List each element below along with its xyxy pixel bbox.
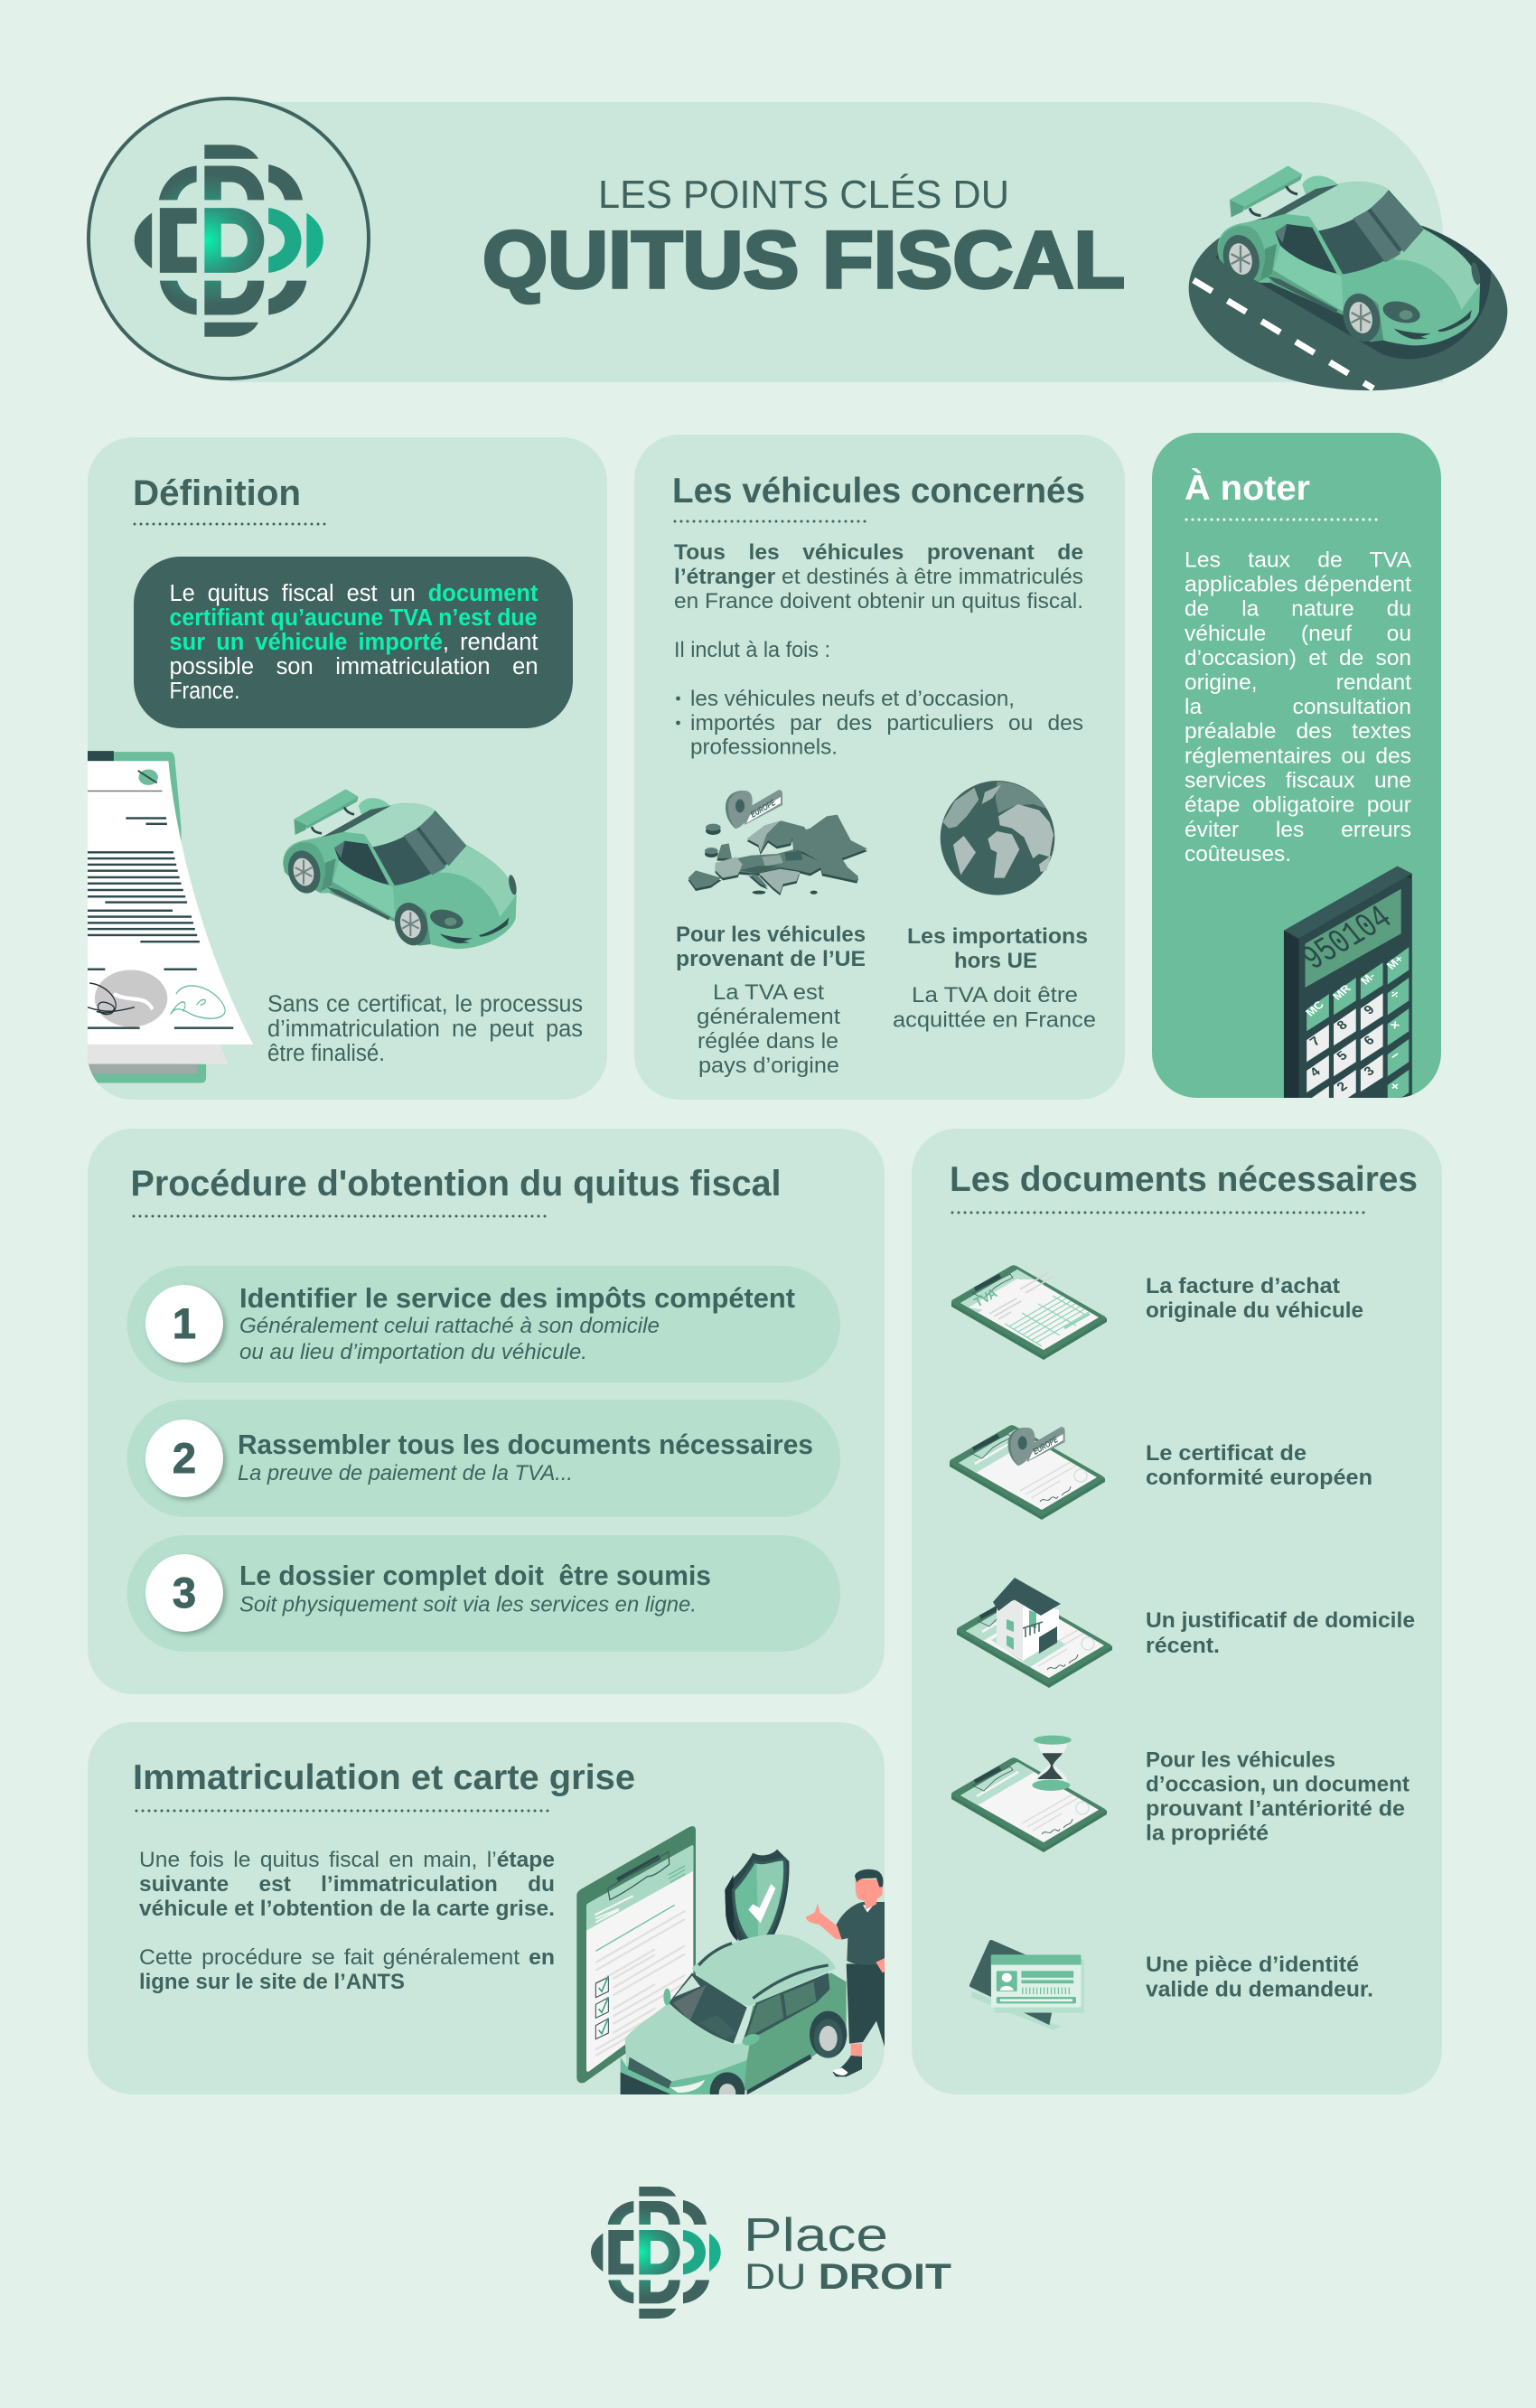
text: EU vehicles: Pour les véhicules (676, 923, 866, 947)
text: note: services fiscaux une (1185, 768, 1411, 793)
text: EU vehicles: provenant de l’UE (676, 947, 866, 971)
text: note: véhicule (neuf ou (1185, 622, 1411, 646)
heading: procédure: Procédure d'obtention du quitus fiscal (130, 1164, 781, 1204)
callout: definition: Le quitus fiscal est un document (170, 581, 539, 606)
step 2 (126, 1400, 840, 1517)
logo mark (591, 2187, 721, 2319)
step 1: ou au lieu d’importation du véhicule. (239, 1340, 587, 1364)
illustration: calculator: 2 (1335, 1080, 1351, 1094)
text: identité: Une pièce d’identité (1146, 1953, 1359, 1977)
panel: Définition (88, 437, 607, 1100)
brand name (744, 2209, 951, 2297)
illustration: calculator: 6 (1362, 1034, 1378, 1048)
panel: Les véhicules concernés (634, 435, 1125, 1100)
text: note: la consultation (1185, 695, 1411, 719)
text: sans ce certificat: Sans ce certificat, le processus (267, 992, 583, 1017)
header band (89, 98, 1516, 406)
heading: À noter: À noter (1185, 468, 1310, 508)
step 2: La preuve de paiement de la TVA... (238, 1461, 573, 1485)
text: non-EU imports (893, 924, 1096, 1032)
text: vehicles intro and list: l’étranger et destinés à être immatriculés (674, 565, 1083, 589)
illustration: calculator: MC (1303, 998, 1326, 1018)
text: vehicles intro and list (674, 540, 1083, 759)
text: immatriculation: Une fois le quitus fiscal en main, l’étape (139, 1848, 555, 1872)
illustration: calculator: 5 (1335, 1049, 1351, 1063)
text: note: coûteuses. (1185, 842, 1291, 867)
step 2: 2 (173, 1434, 196, 1482)
text: note: d’occasion) et de son (1185, 646, 1411, 670)
text: sans ce certificat: être finalisé. (267, 1041, 385, 1066)
text: immatriculation (139, 1848, 555, 1994)
icon: house on clipboard (957, 1578, 1112, 1688)
illustration: calculator: 8 (1335, 1018, 1351, 1033)
illustration: Europe map (688, 790, 867, 895)
text: note (1185, 548, 1412, 867)
step 1: Généralement celui rattaché à son domicile (239, 1314, 660, 1338)
callout: definition (134, 557, 573, 728)
panel: Les documents nécessaires (912, 1129, 1442, 2094)
car (621, 1935, 847, 2112)
step 3: Le dossier complet doit être soumis (239, 1560, 711, 1591)
step 1: Identifier le service des impôts compétent (239, 1283, 795, 1314)
illustration: calculator: ÷ (1387, 988, 1403, 1002)
text: non-EU imports: La TVA doit être (912, 983, 1078, 1007)
text: note: origine, rendant (1185, 670, 1411, 695)
callout: definition: possible son immatriculation en (170, 654, 539, 679)
brand name: Place (744, 2209, 888, 2262)
text: non-EU imports: acquittée en France (893, 1008, 1096, 1032)
text: antériorité (1146, 1747, 1410, 1846)
icon: European certificate clipboard (950, 1425, 1105, 1520)
text: sans ce certificat (267, 992, 583, 1066)
panel: À noter (1152, 433, 1441, 1123)
text: certificat: conformité européen (1146, 1466, 1372, 1490)
title: LES POINTS CLÉS DU (598, 173, 1009, 217)
text: identité: valide du demandeur. (1146, 1978, 1373, 2002)
man (806, 1869, 885, 2076)
text: immatriculation: ligne sur le site de l’ANTS (139, 1970, 405, 1994)
text: EU vehicles: pays d’origine (698, 1054, 839, 1078)
illustration: calculator: MR (1329, 982, 1353, 1002)
text: immatriculation: Cette procédure se fait généralement en (139, 1945, 555, 1970)
text: immatriculation: suivante est l’immatriculation du (139, 1872, 555, 1897)
text: note: étape obligatoire pour (1185, 793, 1411, 818)
text: vehicles intro and list: Tous les véhicules provenant de (674, 540, 1083, 565)
text: facture: originale du véhicule (1146, 1298, 1363, 1323)
callout: definition: France. (170, 679, 240, 704)
footer logo (591, 2187, 951, 2319)
text: non-EU imports: Les importations (907, 924, 1088, 949)
step 1 (126, 1266, 840, 1382)
illustration: calculator: 4 (1307, 1065, 1325, 1080)
illustration: globe (941, 781, 1054, 895)
text: antériorité: la propriété (1146, 1822, 1269, 1846)
step 3: Soit physiquement soit via les services en ligne. (239, 1592, 697, 1617)
heading: immatriculation: Immatriculation et carte grise (133, 1758, 635, 1797)
icon: invoice clipboard (951, 1265, 1107, 1360)
text: vehicles intro and list: les véhicules neufs et d’occasion, (690, 687, 1015, 711)
heading: véhicules concernés: Les véhicules concernés (672, 472, 1085, 511)
step 1: 1 (173, 1299, 196, 1347)
text: certificat (1146, 1441, 1372, 1490)
illustration: calculator: M+ (1383, 952, 1406, 971)
text: sans ce certificat: d’immatriculation ne peut pas (267, 1017, 583, 1042)
illustration: green car (283, 789, 518, 949)
panel: Immatriculation (88, 1722, 885, 2112)
step 3 (126, 1535, 840, 1652)
text: identité (1146, 1953, 1373, 2002)
text: antériorité: prouvant l’antériorité de (1146, 1797, 1405, 1822)
text: vehicles intro and list: professionnels. (690, 736, 838, 759)
text: domicile (1146, 1608, 1415, 1658)
text: facture: La facture d’achat (1146, 1274, 1340, 1298)
illustration: calculator: + (1387, 1080, 1404, 1094)
text: vehicles intro and list: Il inclut à la fois : (674, 638, 830, 662)
illustration: calculator (1284, 867, 1412, 1123)
title (482, 173, 1125, 305)
text: note: éviter les erreurs (1185, 818, 1411, 842)
text: EU vehicles: généralement (697, 1005, 840, 1029)
text: EU vehicles: réglée dans le (698, 1029, 838, 1054)
text: domicile: Un justificatif de domicile (1146, 1608, 1415, 1633)
illustration: car on road (1189, 166, 1507, 390)
text: note: réglementaires ou des (1185, 745, 1411, 768)
callout: definition: sur un véhicule importé, rendant (170, 630, 539, 655)
clipboard (576, 1826, 696, 2083)
text: EU vehicles: La TVA est (713, 980, 824, 1005)
text: facture (1146, 1274, 1363, 1323)
brand name: DU DROIT (745, 2257, 951, 2297)
text: note: préalable des textes (1185, 719, 1411, 744)
text: vehicles intro and list: en France doivent obtenir un quitus fiscal. (674, 589, 1083, 614)
heading: documents: Les documents nécessaires (950, 1160, 1418, 1199)
step 2: Rassembler tous les documents nécessaires (238, 1429, 813, 1460)
text: vehicles intro and list: importés par des particuliers ou des (690, 711, 1083, 736)
icon: hourglass on clipboard (951, 1736, 1107, 1852)
illustration: calculator: 950104 (1295, 900, 1400, 979)
icon: invoice clipboard: TVA (972, 1286, 1000, 1310)
illustration: calculator: × (1387, 1018, 1404, 1033)
text: note: de la nature du (1185, 597, 1411, 622)
illustration: calculator: 3 (1362, 1064, 1378, 1079)
text: note: applicables dépendent (1185, 573, 1411, 597)
callout: definition: certifiant qu’aucune TVA n’est due (170, 605, 537, 631)
text: antériorité: Pour les véhicules (1146, 1747, 1335, 1773)
text: certificat: Le certificat de (1146, 1441, 1307, 1466)
text: domicile: récent. (1146, 1634, 1220, 1658)
text: note: Les taux de TVA (1185, 548, 1412, 573)
text: non-EU imports: hors UE (954, 949, 1037, 973)
panel: Procédure (88, 1129, 885, 1694)
title: QUITUS FISCAL (482, 214, 1125, 305)
illustration: clipboard, shield, car and man (576, 1826, 885, 2112)
illustration: calculator: M- (1357, 970, 1378, 987)
illustration: signed document (88, 751, 253, 1083)
text: immatriculation: véhicule et l’obtention de la carte grise. (139, 1897, 555, 1921)
illustration: calculator: − (1387, 1049, 1404, 1063)
text: EU vehicles (676, 923, 866, 1078)
shield (725, 1849, 790, 1941)
text: antériorité: d’occasion, un document (1146, 1773, 1410, 1796)
icon: ID card (969, 1940, 1084, 2030)
illustration: calculator: 9 (1362, 1003, 1378, 1017)
illustration: calculator: 7 (1307, 1035, 1324, 1049)
step 3: 3 (173, 1569, 196, 1616)
heading: Définition: Définition (133, 473, 301, 513)
logo badge (89, 98, 369, 379)
